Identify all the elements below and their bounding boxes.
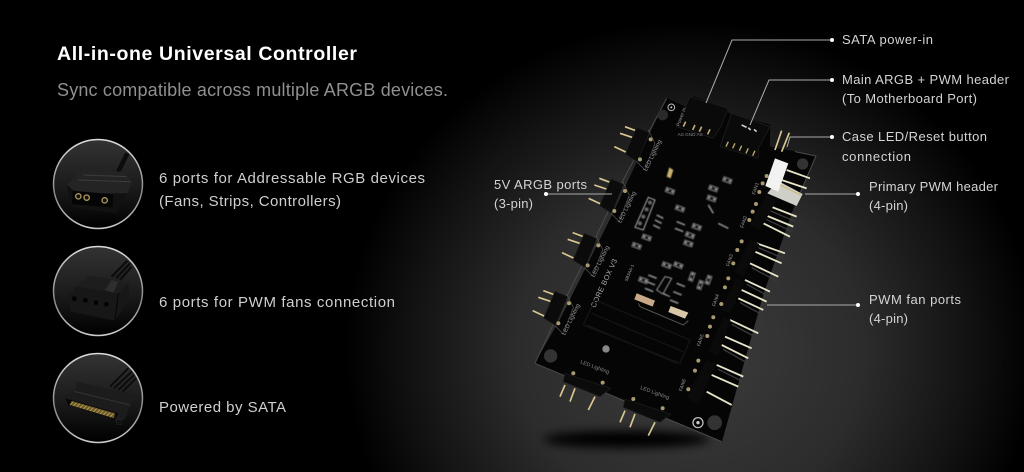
callout: Main ARGB + PWM header: (To Motherboard Port) <box>842 91 977 106</box>
feature text: Powered by SATA <box>159 399 286 416</box>
callout: PWM fan ports: (4-pin) <box>869 311 908 326</box>
callout: Primary PWM header: (4-pin) <box>869 198 908 213</box>
fan solder pads and labels: FAN5 <box>696 333 706 347</box>
fan solder pads and labels: FAN2 <box>740 215 749 229</box>
SATA header <box>676 97 728 138</box>
feature text: (Fans, Strips, Controllers) <box>159 193 341 210</box>
feature: SATA connector <box>54 354 286 442</box>
callout: Primary PWM header <box>805 179 999 213</box>
icon: 4-pin PWM connector <box>54 246 142 336</box>
tan capacitors <box>634 293 688 325</box>
icon: 3-pin ARGB connector <box>54 140 142 228</box>
callout: Case LED/Reset button connection: Case LED/Reset button <box>842 129 987 144</box>
callout: Primary PWM header: Primary PWM header <box>869 179 999 194</box>
fan header housings <box>687 195 777 405</box>
reset button pins <box>775 131 789 152</box>
bottom LED lighting headers <box>560 360 671 436</box>
callout: 5V ARGB ports: 5V ARGB ports <box>494 177 588 192</box>
mounting holes <box>544 104 808 430</box>
callout: Case LED/Reset button connection: connection <box>842 149 911 164</box>
callout: Case LED/Reset button connection <box>787 129 987 164</box>
subtitle: Sync compatible across multiple ARGB devices. <box>57 80 448 100</box>
surface mount components <box>632 167 732 303</box>
callout: PWM fan ports <box>767 292 962 326</box>
callout: SATA power-in: SATA power-in <box>842 32 933 47</box>
left LED lighting headers <box>533 127 663 337</box>
callout: PWM fan ports: PWM fan ports <box>869 292 962 307</box>
callout: Main ARGB + PWM header <box>750 72 1010 125</box>
board markings: CORE BOX V3 <box>589 257 619 309</box>
fan solder pads and labels: FAN3 <box>726 253 735 267</box>
feature: PWM connector <box>54 246 395 336</box>
fan solder pads and labels <box>678 174 769 392</box>
board markings <box>589 257 635 309</box>
feature text: 6 ports for PWM fans connection <box>159 294 395 311</box>
callout: Main ARGB + PWM header: Main ARGB + PWM header <box>842 72 1010 87</box>
main ARGB PWM header <box>720 113 770 158</box>
feature text: 6 ports for Addressable RGB devices <box>159 170 425 187</box>
title: All-in-one Universal Controller <box>57 43 357 65</box>
white PWM connector <box>765 158 803 206</box>
board shadow <box>543 431 710 448</box>
circuit board <box>535 97 816 442</box>
callout: SATA power-in <box>706 32 933 103</box>
callout: 5V ARGB ports <box>494 177 612 211</box>
SATA header: Power In <box>676 107 688 127</box>
fan header pins <box>707 170 810 405</box>
feature: ARGB connector <box>54 140 425 228</box>
controller board photo <box>533 97 816 448</box>
fan solder pads and labels: FAN4 <box>712 293 721 307</box>
SATA header: AS GND AS <box>678 132 703 137</box>
fan solder pads and labels: FAN6 <box>678 378 688 392</box>
callout: 5V ARGB ports: (3-pin) <box>494 196 533 211</box>
board markings: SB3AA-1 <box>624 263 635 282</box>
fan solder pads and labels: FAN1 <box>751 182 761 196</box>
icon: SATA power connector <box>54 354 142 442</box>
heat spreader traces <box>583 300 690 363</box>
